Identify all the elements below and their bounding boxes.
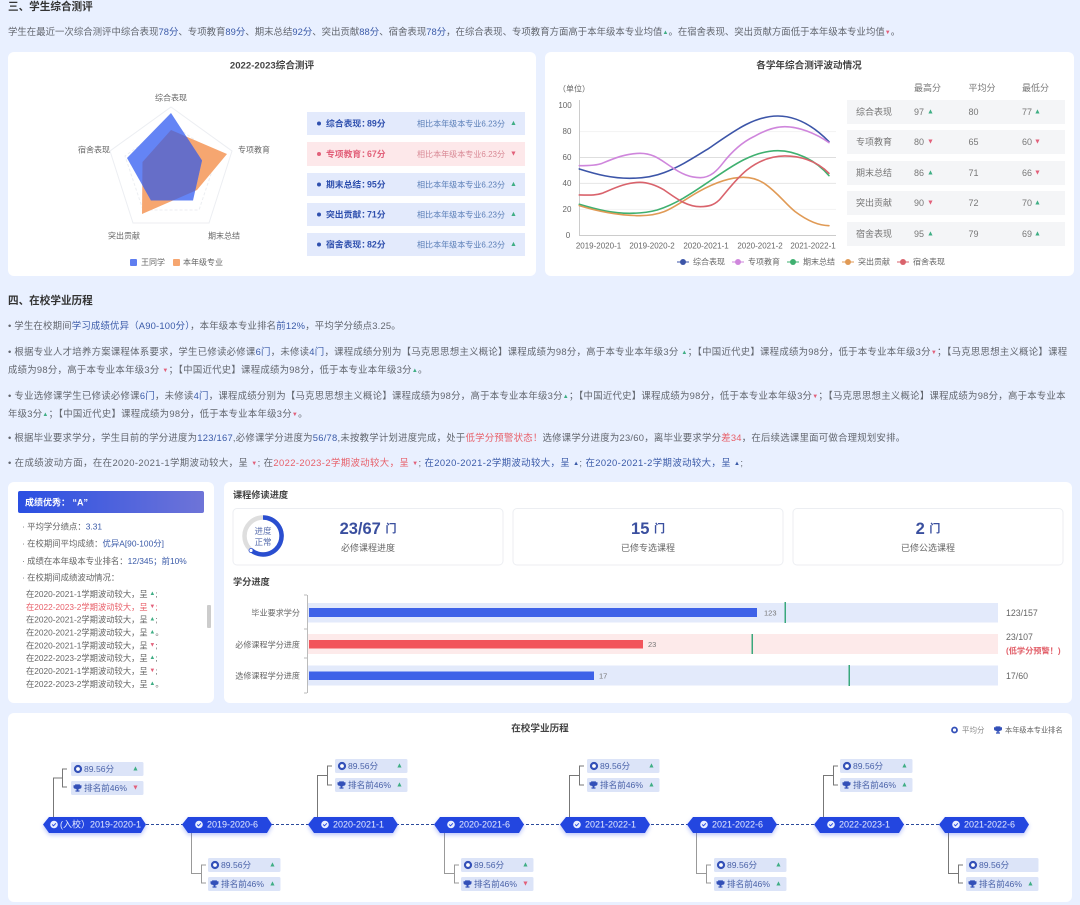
score row: 专项教育 warning: 专项教育：67分 (326, 148, 386, 159)
radar legend: 本年级专业 (183, 257, 223, 267)
radar chart: 综合表现 (155, 92, 187, 102)
score row: 期末总结 (307, 173, 525, 196)
line chart: 100 (558, 101, 572, 110)
score row: 综合表现: 综合表现：89分 (326, 118, 386, 128)
score table: 97 (914, 107, 924, 117)
line chart legend (677, 256, 945, 266)
heading: course progress: 课程修读进度 (233, 489, 288, 500)
timeline node: 2021-2022-6 (687, 817, 777, 833)
card: required courses: 进度 (254, 526, 272, 536)
radar chart: 宿舍表现 (78, 144, 110, 154)
grade facts: · 成绩在本年级本专业排名：12/345；前10% (22, 556, 187, 566)
callout: 2020-2021-6 scores: ▲ (522, 862, 529, 868)
fluctuation list (26, 589, 164, 689)
heading: credit progress: 学分进度 (233, 576, 270, 587)
score table: ▲ (927, 230, 934, 238)
callout: 2019-2020-6 scores (192, 833, 280, 891)
score row: 期末总结: ▲ (510, 181, 517, 188)
grade facts (22, 522, 187, 582)
line chart: 2019-2020-1 (576, 242, 622, 250)
callout: 2020-2021-6 scores: ▼ (522, 880, 529, 888)
timeline node: 2022-2023-1: 2022-2023-1 (839, 820, 890, 830)
line chart legend: 宿舍表现 (913, 256, 945, 266)
callout: 2020-2021-1 scores: 89.56分 (348, 761, 379, 771)
card: required courses: 23/67 门 (340, 520, 396, 538)
bar chart: credits: (低学分预警！) (1006, 646, 1061, 656)
card: major electives: 已修专选课程 (621, 542, 675, 553)
score row: 综合表现 (307, 112, 525, 135)
grade facts: · 平均学分绩点：3.31 (22, 522, 102, 532)
bar chart: credits: 选修课程学分进度 (235, 670, 300, 680)
score table: ▲ (1034, 200, 1041, 206)
timeline node: final 2021-2022-6: 2021-2022-6 (964, 820, 1015, 830)
score table: ▼ (1034, 170, 1041, 176)
score table: ▲ (1034, 230, 1041, 238)
bar chart: credits: 23 (648, 640, 656, 649)
heading: section four: 四、在校学业历程 (8, 295, 93, 307)
card: required courses: 正常 (254, 537, 272, 547)
card: public electives: 2 门 (916, 520, 940, 538)
callout: final 2021-2022-6 scores: 89.56分 (979, 860, 1010, 870)
line chart: 2019-2020-2 (629, 242, 675, 250)
line chart: （单位） (558, 84, 590, 94)
fluctuation list: 在2022-2023-2学期波动较大，呈 ▲; (26, 653, 158, 663)
timeline node: 2021-2022-1 (560, 817, 650, 833)
callout: 2022-2023-1 scores (824, 759, 912, 817)
callout: 2019-2020-1 scores: 排名前46% (84, 782, 127, 793)
score table: 95 (914, 229, 924, 239)
bar chart: credits: 23/107 (1006, 632, 1033, 642)
timeline dashed line (146, 824, 940, 826)
line chart legend: 专项教育 (748, 256, 780, 266)
score row: 突出贡献: 相比本年级本专业6.23分 (417, 210, 505, 220)
grade facts: · 在校期间平均成绩：优异A[90-100分] (22, 538, 164, 548)
text block: elective courses (8, 390, 1066, 419)
score table: 突出贡献 (856, 197, 892, 208)
score table: 72 (968, 198, 979, 208)
line chart: 80 (563, 127, 572, 136)
panel: academic timeline (8, 713, 1072, 902)
text block: grade fluctuation: • 在成绩波动方面，在在2020-2021-1学期波动较大，呈 ▼; 在2022-2023-2学期波动较大，呈 ▼; 在2020-2021-2学期波动较大，呈 ▲; 在2020-2021-2学期波动较大，呈 ▲; (8, 457, 743, 468)
score row: 期末总结: 相比本年级本专业6.23分 (417, 180, 505, 190)
card: major electives (513, 508, 783, 565)
timeline node: 2021-2022-1: 2021-2022-1 (585, 820, 636, 830)
callout: 2021-2022-1 scores: 89.56分 (600, 761, 631, 771)
callout: 2022-2023-1 scores: ▲ (901, 782, 908, 788)
bar chart: credits: 123/157 (1006, 608, 1038, 618)
callout: 2019-2020-6 scores: ▲ (269, 862, 276, 868)
callout: 2020-2021-1 scores (318, 759, 408, 817)
callout: final 2021-2022-6 scores: ▲ (1027, 880, 1034, 888)
score table: 80 (968, 107, 979, 117)
fluctuation list: 在2022-2023-2学期波动较大，呈 ▲。 (26, 679, 164, 689)
line chart: 60 (563, 153, 572, 162)
line chart legend: 突出贡献 (858, 256, 890, 266)
heading: section three: 三、学生综合测评 (8, 1, 93, 13)
bar chart: credits (235, 595, 1061, 693)
line chart legend: 期末总结 (803, 256, 835, 266)
timeline node: 2020-2021-6 (434, 817, 524, 833)
callout: 2019-2020-1 scores: ▲ (132, 766, 139, 772)
callout: 2020-2021-1 scores: 排名前46% (348, 779, 391, 790)
callout: 2019-2020-1 scores: 89.56分 (84, 764, 115, 774)
panel: grade summary (8, 482, 214, 703)
score row: 专项教育 warning: ▼ (510, 150, 517, 158)
callout: 2021-2022-6 scores: 排名前46% (727, 878, 770, 889)
score table: 69 (1022, 229, 1032, 239)
callout: 2022-2023-1 scores: 排名前46% (853, 779, 896, 790)
fluctuation list: 在2020-2021-1学期波动较大，呈 ▼; (26, 641, 158, 651)
grade banner: 成绩优秀： “A” (25, 496, 88, 508)
timeline title: 在校学业历程 (511, 722, 569, 734)
grade banner (18, 491, 204, 513)
score row: 专项教育 warning: 相比本年级本专业6.23分 (417, 149, 505, 159)
timeline node: 2020-2021-1: 2020-2021-1 (333, 820, 384, 830)
score row: 突出贡献 (307, 203, 525, 226)
panel title: 各学年综合测评波动情况 (756, 60, 862, 72)
timeline node: 2019-2020-1: (入校）2019-2020-1 (60, 818, 141, 830)
score table: 60 (1022, 137, 1032, 147)
timeline legend: 本年级本专业排名 (1005, 726, 1063, 734)
score table: ▼ (927, 138, 934, 146)
callout: 2019-2020-6 scores: ▲ (269, 880, 276, 888)
line chart: 2021-2022-1 (790, 242, 836, 250)
callout: 2020-2021-6 scores (444, 833, 534, 891)
line chart legend: 综合表现 (693, 256, 725, 266)
bar chart: credits: 123 (764, 608, 777, 618)
radar chart: 专项教育 (238, 144, 270, 154)
line chart: 40 (563, 179, 572, 188)
radar chart (78, 92, 270, 240)
bar chart: credits: 毕业要求学分 (251, 608, 300, 618)
score table: 宿舍表现 (856, 228, 892, 239)
fluctuation list: 在2020-2021-2学期波动较大，呈 ▲。 (26, 628, 164, 638)
score row: 宿舍表现: 相比本年级本专业6.23分 (417, 240, 505, 250)
score row: 突出贡献: 突出贡献：71分 (326, 208, 386, 220)
score table: ▼ (1034, 138, 1041, 146)
timeline node: 2022-2023-1 (814, 817, 904, 833)
callout: final 2021-2022-6 scores (948, 833, 1038, 891)
callout: 2021-2022-6 scores: 89.56分 (727, 860, 758, 870)
text block: academic performance: • 学生在校期间学习成绩优异（A90-100分），本年级本专业排名前12%，平均学分绩点3.25。 (8, 320, 401, 331)
line chart: 0 (566, 231, 571, 240)
score row: 宿舍表现: ▲ (510, 241, 517, 248)
score table: 65 (968, 137, 979, 147)
panel: yearly fluctuation (545, 52, 1074, 276)
card: required courses (233, 508, 503, 565)
bar chart: credits: 17/60 (1006, 671, 1028, 681)
callout: 2020-2021-1 scores: ▲ (396, 762, 403, 770)
card: required courses: 必修课程进度 (341, 542, 395, 553)
score row: 期末总结: 期末总结：95分 (326, 178, 386, 190)
callout: 2022-2023-1 scores: ▲ (901, 762, 908, 770)
fluctuation list: 在2020-2021-2学期波动较大，呈 ▲; (26, 615, 158, 625)
score table: 77 (1022, 107, 1032, 117)
line chart: 2020-2021-2 (737, 242, 783, 250)
fluctuation list: 在2020-2021-1学期波动较大，呈 ▼; (26, 666, 158, 676)
line chart: 2020-2021-1 (683, 242, 729, 250)
callout: 2021-2022-6 scores (696, 833, 786, 891)
callout: 2019-2020-1 scores (54, 762, 144, 817)
timeline legend (952, 724, 1063, 734)
card: public electives: 已修公选课程 (901, 542, 955, 553)
score row: 宿舍表现: 宿舍表现：82分 (326, 238, 386, 250)
text block: credit progress: • 根据毕业要求学分，学生目前的学分进度为123/167,必修课学分进度为56/78,未按教学计划进度完成，处于低学分预警状态！选修课学分进度为23/60，离毕业要求学分差34，在后续选课里面可做合理规划安排。 (8, 432, 905, 443)
card: major electives: 15 门 (631, 520, 665, 538)
score table: ▲ (927, 170, 934, 176)
score table: 80 (914, 137, 924, 147)
text block: elective courses: 年级3分▲；【中国近代史】课程成绩为98分，低于本专业本年级3分▼。 (8, 408, 308, 418)
text block: required courses: 成绩为98分，高于本专业本年级3分 ▼；【中国近代史】课程成绩为98分，低于本专业本年级3分▲。 (8, 364, 428, 374)
panel: 2022-2023 radar evaluation (8, 52, 536, 276)
score row: 专项教育 warning (307, 142, 525, 166)
card: public electives (793, 508, 1063, 565)
callout: 2021-2022-1 scores: ▲ (648, 782, 655, 788)
timeline node: 2019-2020-1 (43, 817, 146, 833)
score table: 90 (914, 198, 924, 208)
panel: course and credit progress (224, 482, 1072, 703)
fluctuation list: 在2022-2023-2学期波动较大，呈 ▼; (26, 602, 158, 612)
callout: 2021-2022-1 scores: ▲ (648, 762, 655, 770)
callout: 2020-2021-6 scores: 排名前46% (474, 878, 517, 889)
callout: 2019-2020-6 scores: 89.56分 (221, 860, 252, 870)
callout: 2019-2020-6 scores: 排名前46% (221, 878, 264, 889)
score table: 71 (968, 168, 979, 178)
timeline node: 2020-2021-6: 2020-2021-6 (459, 820, 510, 830)
score table: 79 (968, 229, 979, 239)
score table: 期末总结 (856, 167, 892, 178)
score table: 专项教育 (856, 136, 892, 147)
text block: elective courses: • 专业选修课学生已修读必修课6门，未修读4门，课程成绩分别为【马克思思想主义概论】课程成绩为98分，高于本专业本年级3分▲；【中国近代史】课程成绩为98分，低于本专业本年级3分▼；【马克思思想主义概论】课程成绩为98分，高于本专业本 (8, 390, 1066, 401)
score table: 最低分 (1022, 82, 1049, 93)
callout: 2021-2022-6 scores: ▲ (775, 880, 782, 888)
callout: 2019-2020-1 scores: ▼ (132, 784, 139, 792)
score table: ▲ (927, 108, 934, 116)
score table: 86 (914, 168, 924, 178)
radar chart: 突出贡献 (108, 230, 140, 240)
timeline node: final 2021-2022-6 (939, 817, 1029, 833)
line chart (558, 84, 836, 250)
text block: required courses (8, 346, 1067, 375)
score table: ▼ (927, 200, 934, 206)
score row: 宿舍表现 (307, 233, 525, 256)
scrollbar (207, 605, 211, 628)
timeline node: 2020-2021-1 (308, 817, 398, 833)
callout: 2022-2023-1 scores: 89.56分 (853, 761, 884, 771)
score row: 综合表现: 相比本年级本专业6.23分 (417, 118, 505, 128)
timeline node: 2019-2020-6 (182, 817, 272, 833)
line chart: 20 (563, 205, 572, 214)
callout: 2020-2021-1 scores: ▲ (396, 782, 403, 788)
score table (847, 82, 1065, 246)
score table: 最高分 (914, 82, 941, 93)
grade facts: · 在校期间成绩波动情况： (22, 572, 119, 582)
fluctuation list: 在2020-2021-1学期波动较大，呈 ▲; (26, 589, 158, 599)
text block: evaluation summary: 学生在最近一次综合测评中综合表现78分、专项教育89分、期末总结92分、突出贡献88分、宿舍表现78分，在综合表现、专项教育方面高于本年级本专业均值▲。在宿舍表现、突出贡献方面低于本年级本专业均值▼。 (8, 26, 900, 37)
score table: 70 (1022, 198, 1032, 208)
callout: final 2021-2022-6 scores: 排名前46% (979, 878, 1022, 889)
timeline legend: 平均分 (962, 724, 985, 734)
callout: 2021-2022-6 scores: ▲ (775, 862, 782, 868)
callout: 2021-2022-1 scores: 排名前46% (600, 779, 643, 790)
score table: ▲ (1034, 108, 1041, 116)
score row: 突出贡献: ▲ (510, 211, 517, 218)
radar legend: 王同学 (141, 257, 165, 267)
callout: 2021-2022-1 scores (570, 759, 660, 817)
radar legend (130, 257, 223, 267)
timeline node: 2019-2020-6: 2019-2020-6 (207, 820, 258, 830)
bar chart: credits: 必修课程学分进度 (235, 640, 300, 650)
bar chart: credits: 17 (599, 672, 607, 680)
text block: required courses: • 根据专业人才培养方案课程体系要求，学生已修读必修课6门，未修读4门，课程成绩分别为【马克思思想主义概论】课程成绩为98分，高于本专业本年级3分 ▲；【中国近代史】课程成绩为98分，低于本专业本年级3分▼；【马克思思想主义概论】课程 (8, 346, 1067, 357)
callout: 2020-2021-6 scores: 89.56分 (474, 860, 505, 870)
score table: 综合表现 (856, 106, 892, 117)
radar chart: 期末总结 (208, 230, 240, 240)
score table: 平均分 (968, 82, 996, 93)
panel title: 2022-2023综合测评 (230, 60, 315, 72)
score row: 综合表现: ▲ (510, 120, 517, 127)
score table: 66 (1022, 168, 1032, 178)
timeline node: 2021-2022-6: 2021-2022-6 (712, 820, 763, 830)
